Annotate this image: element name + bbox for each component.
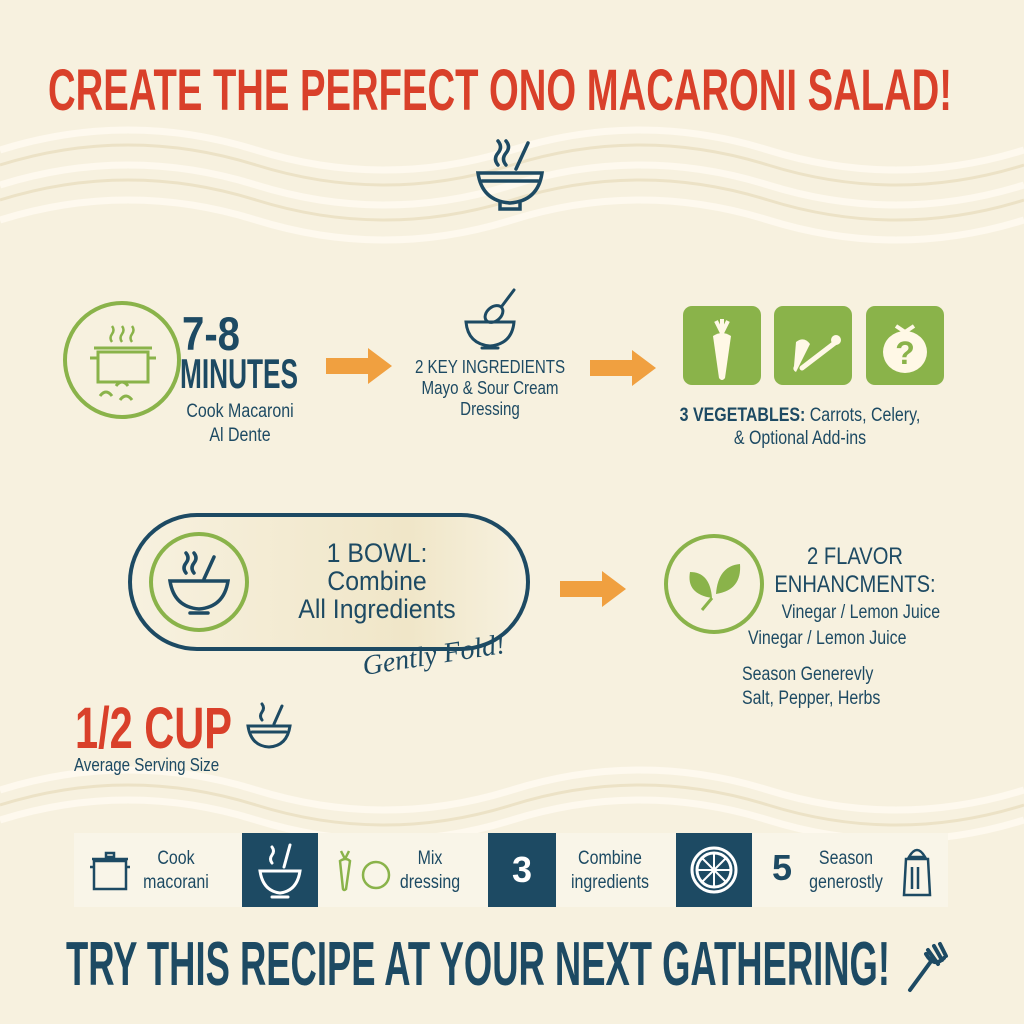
text: combine bbox=[298, 538, 456, 624]
text: season: Season Generevly bbox=[742, 664, 873, 685]
icons: vegetables bbox=[683, 306, 944, 385]
text: vinegar: Vinegar / Lemon Juice bbox=[782, 602, 940, 623]
step lemon dark bbox=[676, 833, 752, 907]
icon: carrot celery bbox=[774, 306, 852, 385]
panel: step bar: macorani bbox=[143, 872, 209, 893]
text: season: Salt, Pepper, Herbs bbox=[742, 688, 880, 709]
panel: step bar: dressing bbox=[400, 872, 460, 893]
icon: whisk bowl bbox=[464, 288, 516, 350]
icon: fork bbox=[908, 942, 948, 992]
panel: step bar: ingredients bbox=[571, 872, 649, 893]
panel: step bar: Mix bbox=[418, 848, 442, 869]
text: key ingredients: Dressing bbox=[460, 399, 520, 419]
step 5: 5 bbox=[772, 847, 792, 888]
text: vinegar: Vinegar / Lemon Juice bbox=[748, 628, 907, 649]
arrow 2 bbox=[590, 350, 656, 386]
icon: leaf circle bbox=[664, 534, 764, 634]
arrow 3 bbox=[560, 571, 626, 607]
panel: 1 bowl pill bbox=[128, 513, 530, 651]
panel: step bar: Season bbox=[819, 848, 873, 869]
icon: mystery: ? bbox=[895, 335, 915, 371]
panel: step bar: generostly bbox=[809, 872, 883, 893]
text: key ingredients: 2 KEY INGREDIENTS bbox=[415, 357, 565, 377]
text: flavor: ENHANCMENTS: bbox=[774, 571, 936, 598]
text: 7-8 minutes bbox=[180, 307, 298, 395]
text: vegetables: & Optional Add-ins bbox=[734, 428, 866, 449]
text: vegetables: 3 VEGETABLES: Carrots, Celery, bbox=[680, 405, 920, 426]
text: flavor: 2 FLAVOR bbox=[807, 543, 903, 570]
text: vinegar bbox=[748, 602, 940, 649]
text: vegetables bbox=[680, 405, 920, 449]
text: combine: Combine bbox=[327, 566, 427, 596]
text: 7-8 minutes: 7-8 bbox=[182, 307, 240, 360]
icon: carrot bbox=[683, 306, 761, 385]
text: gently fold: Gently Fold! bbox=[360, 629, 507, 682]
panel: step bar bbox=[74, 833, 948, 907]
step mix bbox=[338, 850, 390, 892]
icon: small bowl bbox=[246, 702, 292, 748]
icon: bowl circle bbox=[149, 532, 249, 632]
text: cook macaroni bbox=[186, 401, 294, 446]
text: combine: All Ingredients bbox=[298, 594, 456, 624]
text: combine: 1 BOWL: bbox=[327, 538, 427, 568]
text: cook macaroni: Cook Macaroni bbox=[186, 401, 294, 422]
icon: mystery bbox=[866, 306, 944, 385]
panel: step bar: Cook bbox=[157, 848, 195, 869]
text: season bbox=[742, 664, 880, 709]
text: flavor bbox=[774, 543, 936, 598]
text: key ingredients bbox=[415, 357, 565, 419]
step 3 dark: 3 bbox=[512, 849, 532, 890]
step 2 dark bbox=[242, 833, 318, 907]
step 1 bbox=[90, 852, 130, 890]
step 3 dark bbox=[488, 833, 556, 907]
arrow 1 bbox=[326, 348, 392, 384]
icon: pot circle bbox=[63, 301, 181, 419]
text: cook macaroni: Al Dente bbox=[209, 425, 271, 446]
text: key ingredients: Mayo & Sour Cream bbox=[422, 378, 558, 398]
panel: step bar: Combine bbox=[578, 848, 642, 869]
icon: bowl header bbox=[476, 139, 544, 211]
text: serving: Average Serving Size bbox=[74, 755, 219, 775]
